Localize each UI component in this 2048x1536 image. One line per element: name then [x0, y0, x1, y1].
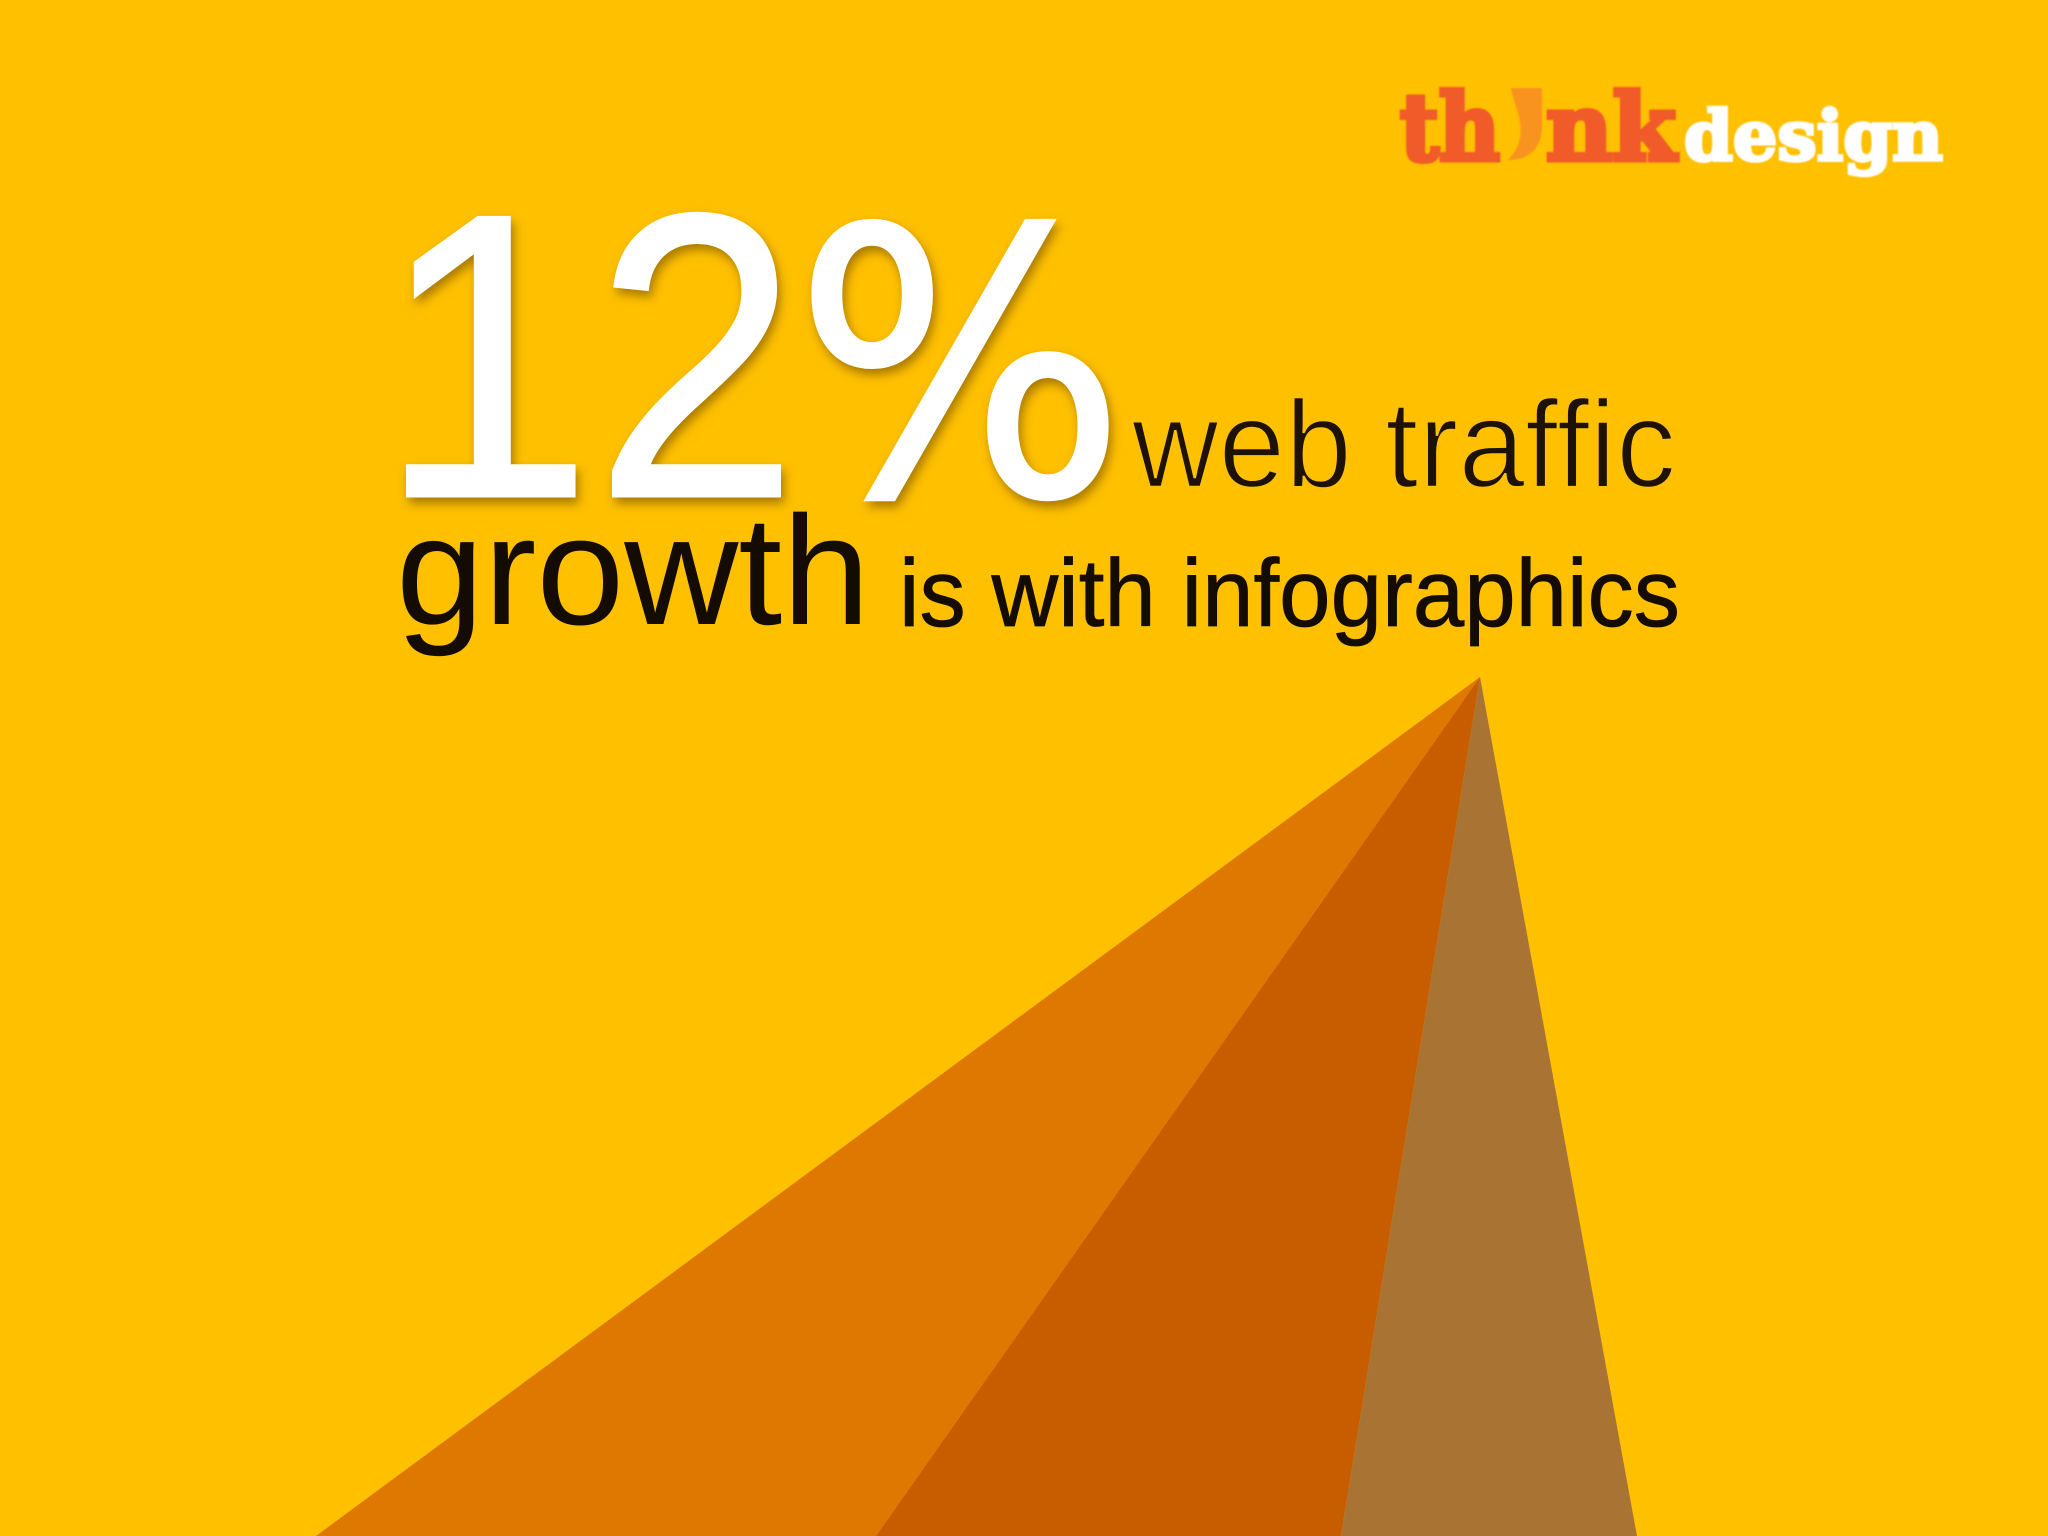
headline text: is with infographics: is with infographics [899, 540, 1680, 647]
logo icon: curved i [1508, 88, 1542, 160]
logo word: design: design [1684, 96, 1943, 177]
logo word: th: th [1400, 73, 1500, 182]
logo: think design [1400, 73, 1943, 182]
digit: 1: 1 [378, 129, 593, 582]
percent sign: % [794, 152, 1126, 581]
headline text: growth: growth [396, 484, 870, 657]
digit: 2: 2 [595, 129, 798, 582]
logo word: nk: nk [1546, 73, 1679, 182]
headline figure: 12% [378, 129, 1126, 582]
chart: three converging triangles [316, 677, 1637, 1536]
headline text: web traffic: web traffic [1131, 376, 1676, 514]
triangle: brown [1341, 677, 1637, 1536]
triangle: light orange [316, 677, 1480, 1536]
triangle: dark orange [876, 677, 1480, 1536]
